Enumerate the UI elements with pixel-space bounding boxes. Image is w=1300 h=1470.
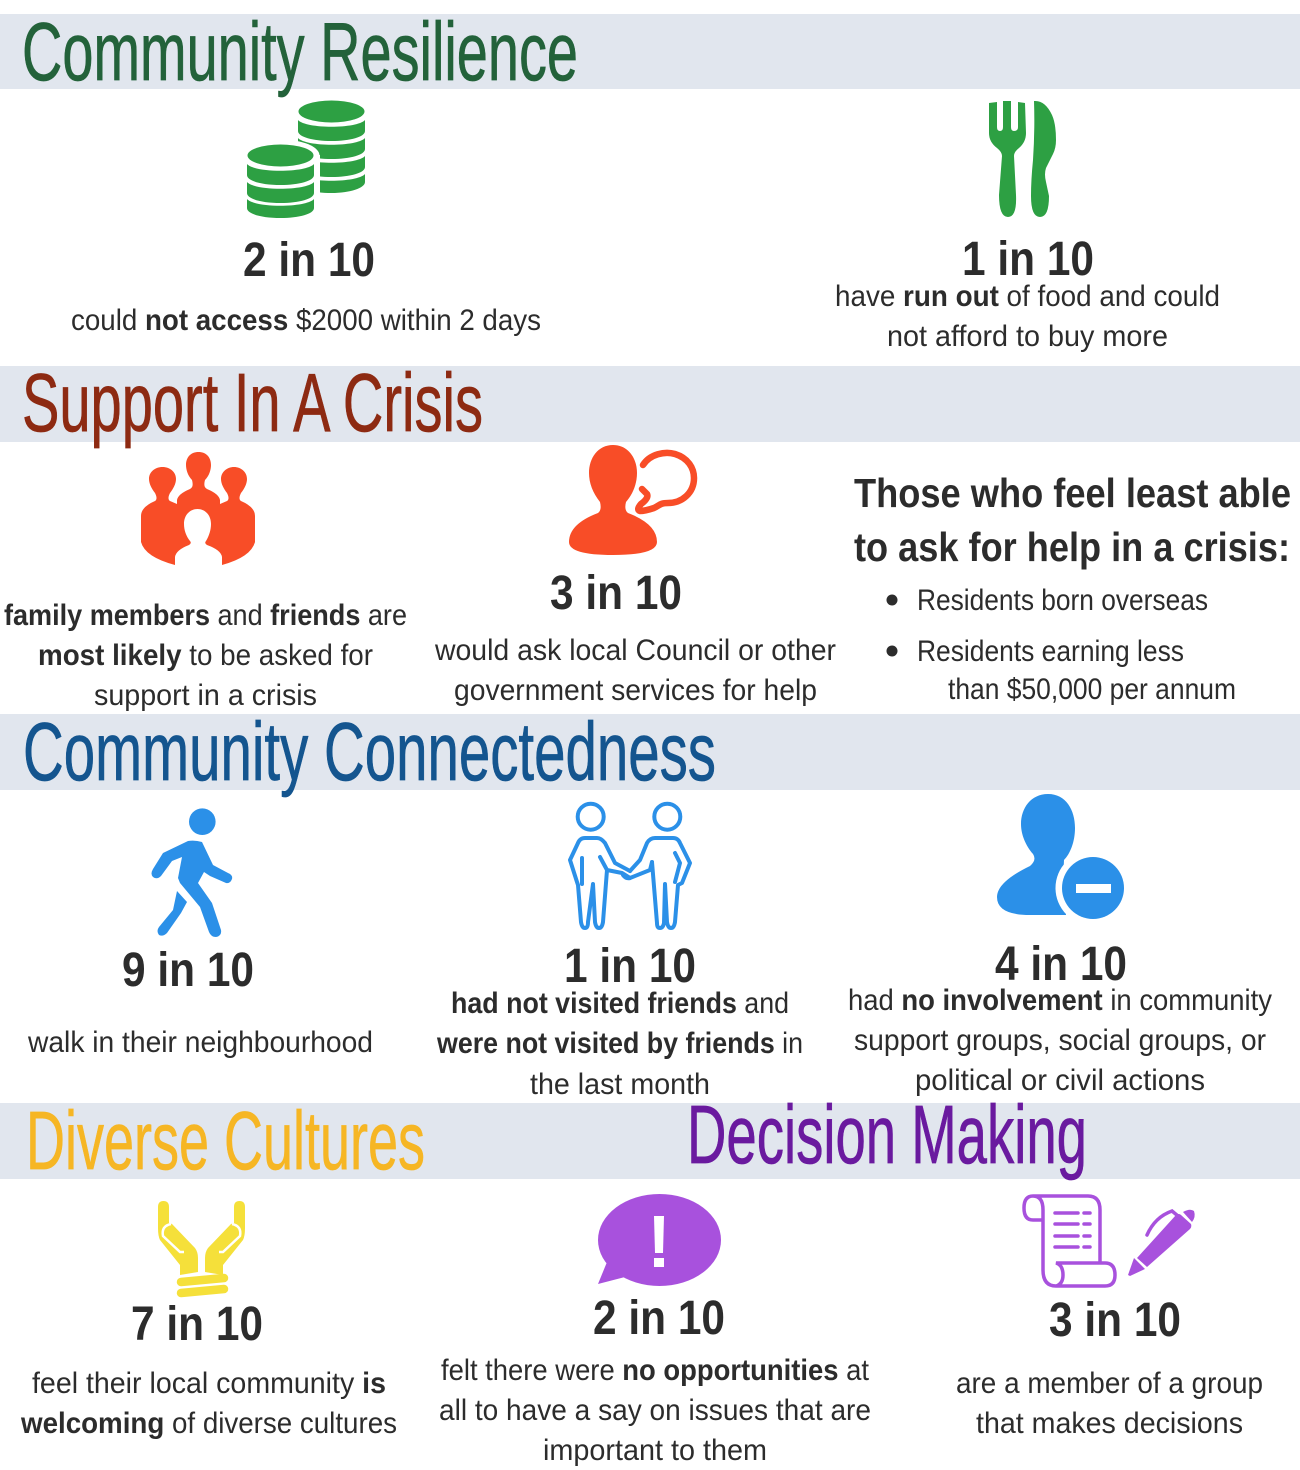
text: could not access: could not access $2000 within 2 days bbox=[71, 304, 541, 337]
callout: least able to ask for help: Residents earning less bbox=[917, 635, 1184, 668]
heading band: diverse cultures and decision making: Decision Making bbox=[687, 1088, 1087, 1181]
icon: person with speech bubble bbox=[569, 445, 694, 555]
stat: 2 in 10: 2 in 10 bbox=[593, 1292, 725, 1345]
panel: support in a crisis bbox=[0, 356, 1300, 712]
stat: 4 in 10: 4 in 10 bbox=[995, 938, 1127, 991]
text: would ask local council bbox=[434, 634, 836, 707]
text: member of a group: that makes decisions bbox=[976, 1407, 1243, 1440]
text: no opportunities: all to have a say on issues that are bbox=[439, 1394, 871, 1427]
stat: 3 in 10: 3 in 10 bbox=[550, 567, 682, 620]
stat: 7 in 10: 7 in 10 bbox=[131, 1298, 263, 1351]
heading band: support in a crisis bbox=[0, 356, 1300, 449]
text: no involvement: had no involvement in community bbox=[848, 984, 1272, 1017]
stat: 3 in 10: 3 in 10 bbox=[1049, 1294, 1181, 1347]
stat: 1 in 10: 1 in 10 bbox=[962, 233, 1094, 286]
text: family members and friends: support in a crisis bbox=[94, 679, 317, 712]
icon: fork and knife bbox=[989, 101, 1056, 217]
text: run out of food: have run out of food and could bbox=[835, 280, 1220, 313]
heading band: community resilience bbox=[0, 5, 1300, 98]
text: no opportunities bbox=[439, 1354, 871, 1467]
text: run out of food bbox=[835, 280, 1220, 353]
text: no involvement bbox=[848, 984, 1272, 1097]
callout: least able to ask for help: than $50,000 per annum bbox=[948, 673, 1236, 706]
stat: 2 in 10: 2 in 10 bbox=[243, 234, 375, 287]
text: not visited friends: were not visited by friends in bbox=[436, 1027, 803, 1060]
text: welcoming of diverse cultures: welcoming of diverse cultures bbox=[20, 1407, 397, 1440]
panel: community resilience bbox=[0, 5, 1300, 353]
callout: least able to ask for help bbox=[854, 470, 1291, 706]
text: member of a group bbox=[956, 1367, 1263, 1440]
panel: diverse cultures bbox=[20, 1201, 397, 1440]
heading band: support in a crisis: Support In A Crisis bbox=[22, 356, 483, 449]
text: family members and friends: family members and friends are bbox=[4, 599, 407, 632]
text: not visited friends bbox=[436, 987, 803, 1101]
text: would ask local council: government services for help bbox=[454, 674, 817, 707]
text: family members and friends bbox=[4, 599, 407, 712]
panel: community connectedness bbox=[0, 705, 1300, 1101]
icon: cupped hands bbox=[158, 1201, 245, 1293]
text: not visited friends: had not visited friends and bbox=[451, 987, 789, 1020]
icon: speech bubble with exclamation mark bbox=[598, 1194, 721, 1286]
text: welcoming of diverse cultures bbox=[20, 1367, 397, 1440]
panel: decision making bbox=[439, 1194, 1263, 1467]
heading band: community resilience: Community Resilience bbox=[22, 5, 578, 98]
icon: walking person bbox=[152, 808, 232, 937]
text: run out of food: not afford to buy more bbox=[887, 320, 1168, 353]
heading band: diverse cultures and decision making bbox=[0, 1088, 1300, 1187]
text: welcoming of diverse cultures: feel their local community is bbox=[32, 1367, 386, 1400]
heading band: community connectedness: Community Connectedness bbox=[23, 705, 716, 798]
icon: scroll and pen bbox=[1024, 1196, 1195, 1286]
heading band: diverse cultures and decision making: Diverse Cultures bbox=[26, 1094, 425, 1187]
text: walk in their neighbourhood: walk in their neighbourhood bbox=[27, 1026, 373, 1059]
text: would ask local council: would ask local Council or other bbox=[434, 634, 836, 667]
callout: least able to ask for help: Residents born overseas bbox=[917, 584, 1208, 617]
icon: person with minus sign bbox=[997, 794, 1130, 926]
icon: group of people bbox=[141, 452, 255, 565]
icon: coin stacks bbox=[241, 100, 365, 225]
text: no involvement: support groups, social groups, or bbox=[854, 1024, 1266, 1057]
text: family members and friends: most likely to be asked for bbox=[38, 639, 373, 672]
text: no opportunities: felt there were no opportunities at bbox=[441, 1354, 870, 1387]
stat: 1 in 10: 1 in 10 bbox=[564, 940, 696, 993]
text: member of a group: are a member of a group bbox=[956, 1367, 1263, 1400]
text: no opportunities: important to them bbox=[543, 1434, 767, 1467]
text: no involvement: political or civil actions bbox=[915, 1064, 1205, 1097]
icon: two people shaking hands bbox=[570, 804, 690, 928]
text: not visited friends: the last month bbox=[530, 1068, 710, 1101]
stat: 9 in 10: 9 in 10 bbox=[122, 944, 254, 997]
